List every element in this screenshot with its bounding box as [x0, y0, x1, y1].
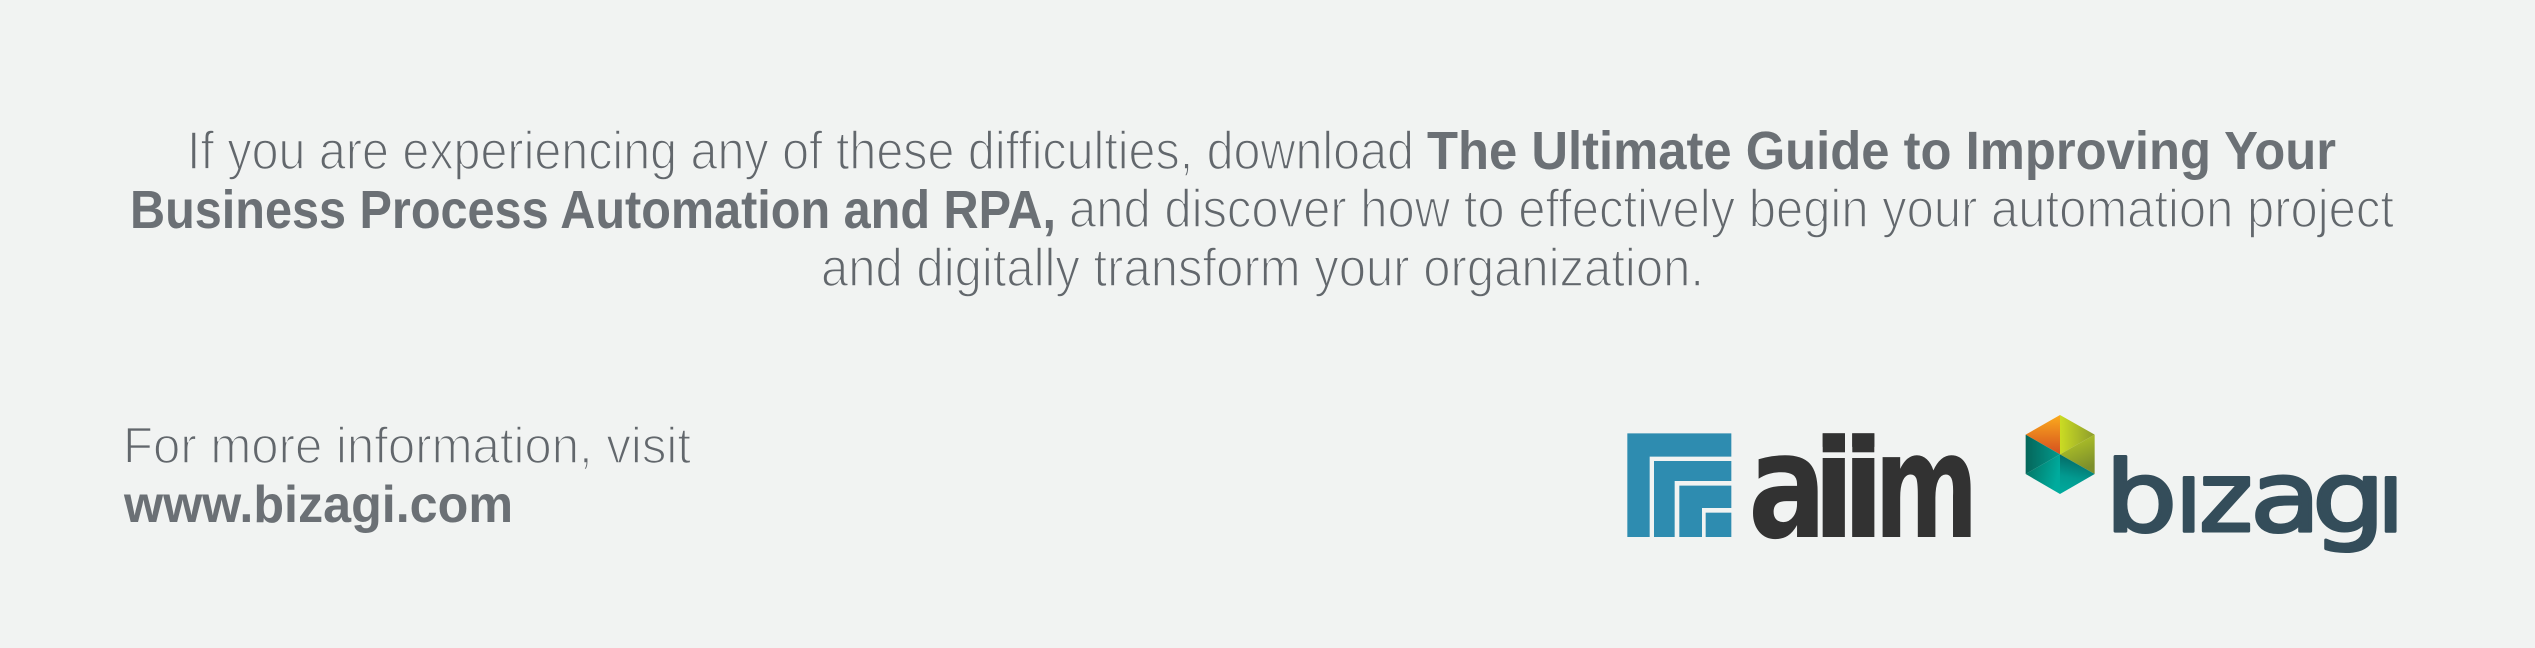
bizagi wordmark: i: [2175, 441, 2202, 555]
text block: more information link: [123, 417, 691, 534]
icon: aiim nested square mark: [1627, 433, 1731, 537]
line 2 light text: and discover how to effectively begin your automation project: [1069, 179, 2394, 239]
bizagi wordmark: b: [2105, 441, 2177, 555]
more information label: For more information, visit: [123, 417, 691, 474]
aiim wordmark: i: [1842, 403, 1885, 572]
bizagi wordmark: [2105, 440, 2404, 555]
line 2 bold guide title: Business Process Automation and RPA,: [130, 180, 1056, 240]
aiim wordmark: a: [1748, 402, 1827, 572]
bizagi wordmark: g: [2312, 441, 2385, 555]
text block: main call to action: [130, 121, 2394, 298]
line 1 bold guide title: The Ultimate Guide to Improving Your: [1427, 121, 2336, 181]
logo: bizagi: [2026, 415, 2404, 555]
icon: bizagi hexagon mark: [2026, 415, 2095, 494]
aiim wordmark: i: [1812, 403, 1856, 572]
aiim wordmark: m: [1874, 402, 1979, 572]
aiim wordmark: [1748, 402, 1979, 572]
bizagi wordmark: a: [2250, 441, 2321, 555]
line 1 light text: If you are experiencing any of these difficulties, download: [187, 121, 1414, 181]
bizagi wordmark: i: [2377, 441, 2404, 555]
bizagi wordmark: z: [2199, 440, 2253, 554]
logo: aiim: [1627, 402, 1979, 572]
website address: www.bizagi.com: [123, 476, 513, 534]
line 3 light text: and digitally transform your organization.: [821, 238, 1704, 298]
